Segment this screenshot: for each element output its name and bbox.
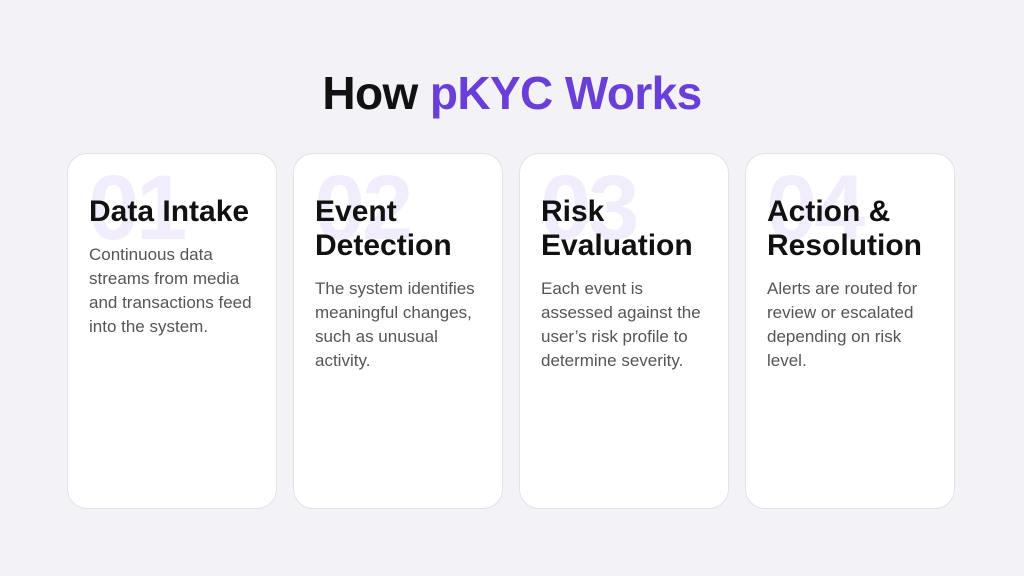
- heading: [315, 195, 452, 262]
- panel: event detection: [293, 153, 503, 509]
- body text: activity.: [315, 351, 370, 370]
- number 02: 02: [314, 157, 410, 259]
- body text: and transactions feed: [89, 293, 252, 312]
- body text: [315, 279, 475, 370]
- body text: [541, 279, 701, 370]
- heading: Event: [315, 195, 397, 228]
- number 01: 01: [88, 157, 184, 259]
- body text: review or escalated: [767, 303, 913, 322]
- body text: determine severity.: [541, 351, 683, 370]
- body text: Continuous data: [89, 245, 213, 264]
- body text: meaningful changes,: [315, 303, 472, 322]
- body text: [767, 279, 917, 370]
- heading: Risk: [541, 195, 604, 228]
- body text: user’s risk profile to: [541, 327, 688, 346]
- heading: Detection: [315, 229, 452, 262]
- body text: streams from media: [89, 269, 239, 288]
- body text: level.: [767, 351, 807, 370]
- body text: Alerts are routed for: [767, 279, 917, 298]
- heading: [767, 195, 922, 262]
- panel: action & resolution: [745, 153, 955, 509]
- heading: [541, 195, 693, 262]
- body text: The system identifies: [315, 279, 475, 298]
- body text: depending on risk: [767, 327, 901, 346]
- heading: Resolution: [767, 229, 922, 262]
- body text: [89, 245, 252, 336]
- body text: into the system.: [89, 317, 208, 336]
- body text: assessed against the: [541, 303, 701, 322]
- body text: such as unusual: [315, 327, 438, 346]
- panel: risk evaluation: [519, 153, 729, 509]
- heading: Evaluation: [541, 229, 693, 262]
- heading: Action &: [767, 195, 890, 228]
- number 04: 04: [766, 157, 862, 259]
- heading: Data Intake: [89, 195, 249, 228]
- body text: Each event is: [541, 279, 643, 298]
- number 03: 03: [540, 157, 636, 259]
- panel: data intake: [67, 153, 277, 509]
- title: How pKYC Works: [322, 67, 702, 119]
